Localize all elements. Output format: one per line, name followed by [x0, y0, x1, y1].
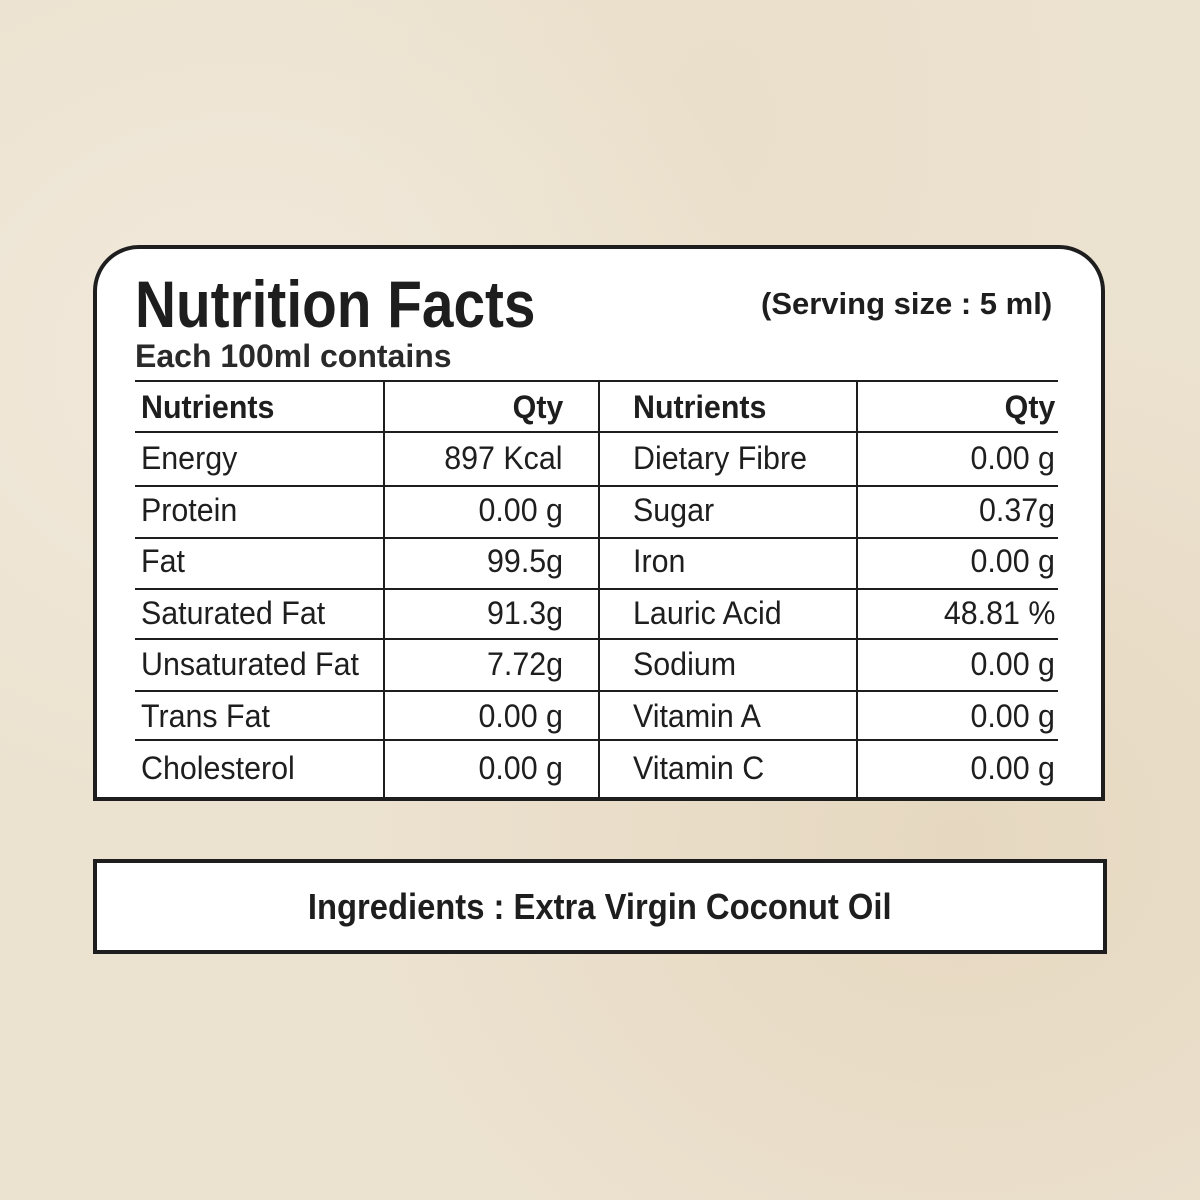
panel: ingredients — [93, 859, 1107, 954]
table text: 0.00 g — [478, 492, 563, 528]
table text: Energy — [141, 440, 237, 476]
table text: Protein — [141, 492, 237, 528]
table text: 897 Kcal — [445, 440, 563, 476]
table text: Trans Fat — [141, 698, 270, 734]
table text: 0.00 g — [970, 646, 1055, 682]
table text: Saturated Fat — [141, 595, 325, 631]
table text: Qty — [1004, 389, 1055, 425]
table text: 91.3g — [487, 595, 563, 631]
table text: 0.00 g — [478, 750, 563, 786]
table text: Sodium — [633, 646, 736, 682]
subtitle: Each 100ml contains — [135, 338, 452, 374]
table text: 48.81 % — [943, 595, 1055, 631]
table text — [141, 389, 1056, 786]
table text: Vitamin C — [633, 750, 764, 786]
table text: 7.72g — [487, 646, 563, 682]
table text: Iron — [633, 543, 685, 579]
serving size: (Serving size : 5 ml) — [761, 286, 1052, 321]
table text: Cholesterol — [141, 750, 295, 786]
table text: Unsaturated Fat — [141, 646, 359, 682]
table text: Sugar — [633, 492, 714, 528]
table text: Lauric Acid — [633, 595, 782, 631]
table text: 99.5g — [487, 543, 563, 579]
ingredients text: Ingredients : Extra Virgin Coconut Oil — [308, 886, 892, 927]
table text: Dietary Fibre — [633, 440, 807, 476]
table text: 0.00 g — [970, 543, 1055, 579]
table text: Vitamin A — [633, 698, 761, 734]
table text: 0.00 g — [478, 698, 563, 734]
table — [135, 380, 1058, 797]
table text: Fat — [141, 543, 185, 579]
panel: nutrition facts — [93, 245, 1105, 801]
table text: 0.00 g — [970, 440, 1055, 476]
table text: 0.37g — [979, 492, 1055, 528]
table text: Nutrients — [141, 389, 274, 425]
table text: 0.00 g — [970, 698, 1055, 734]
title: Nutrition Facts — [135, 267, 535, 341]
table text: Nutrients — [633, 389, 766, 425]
table text: Qty — [512, 389, 563, 425]
table text: 0.00 g — [970, 750, 1055, 786]
